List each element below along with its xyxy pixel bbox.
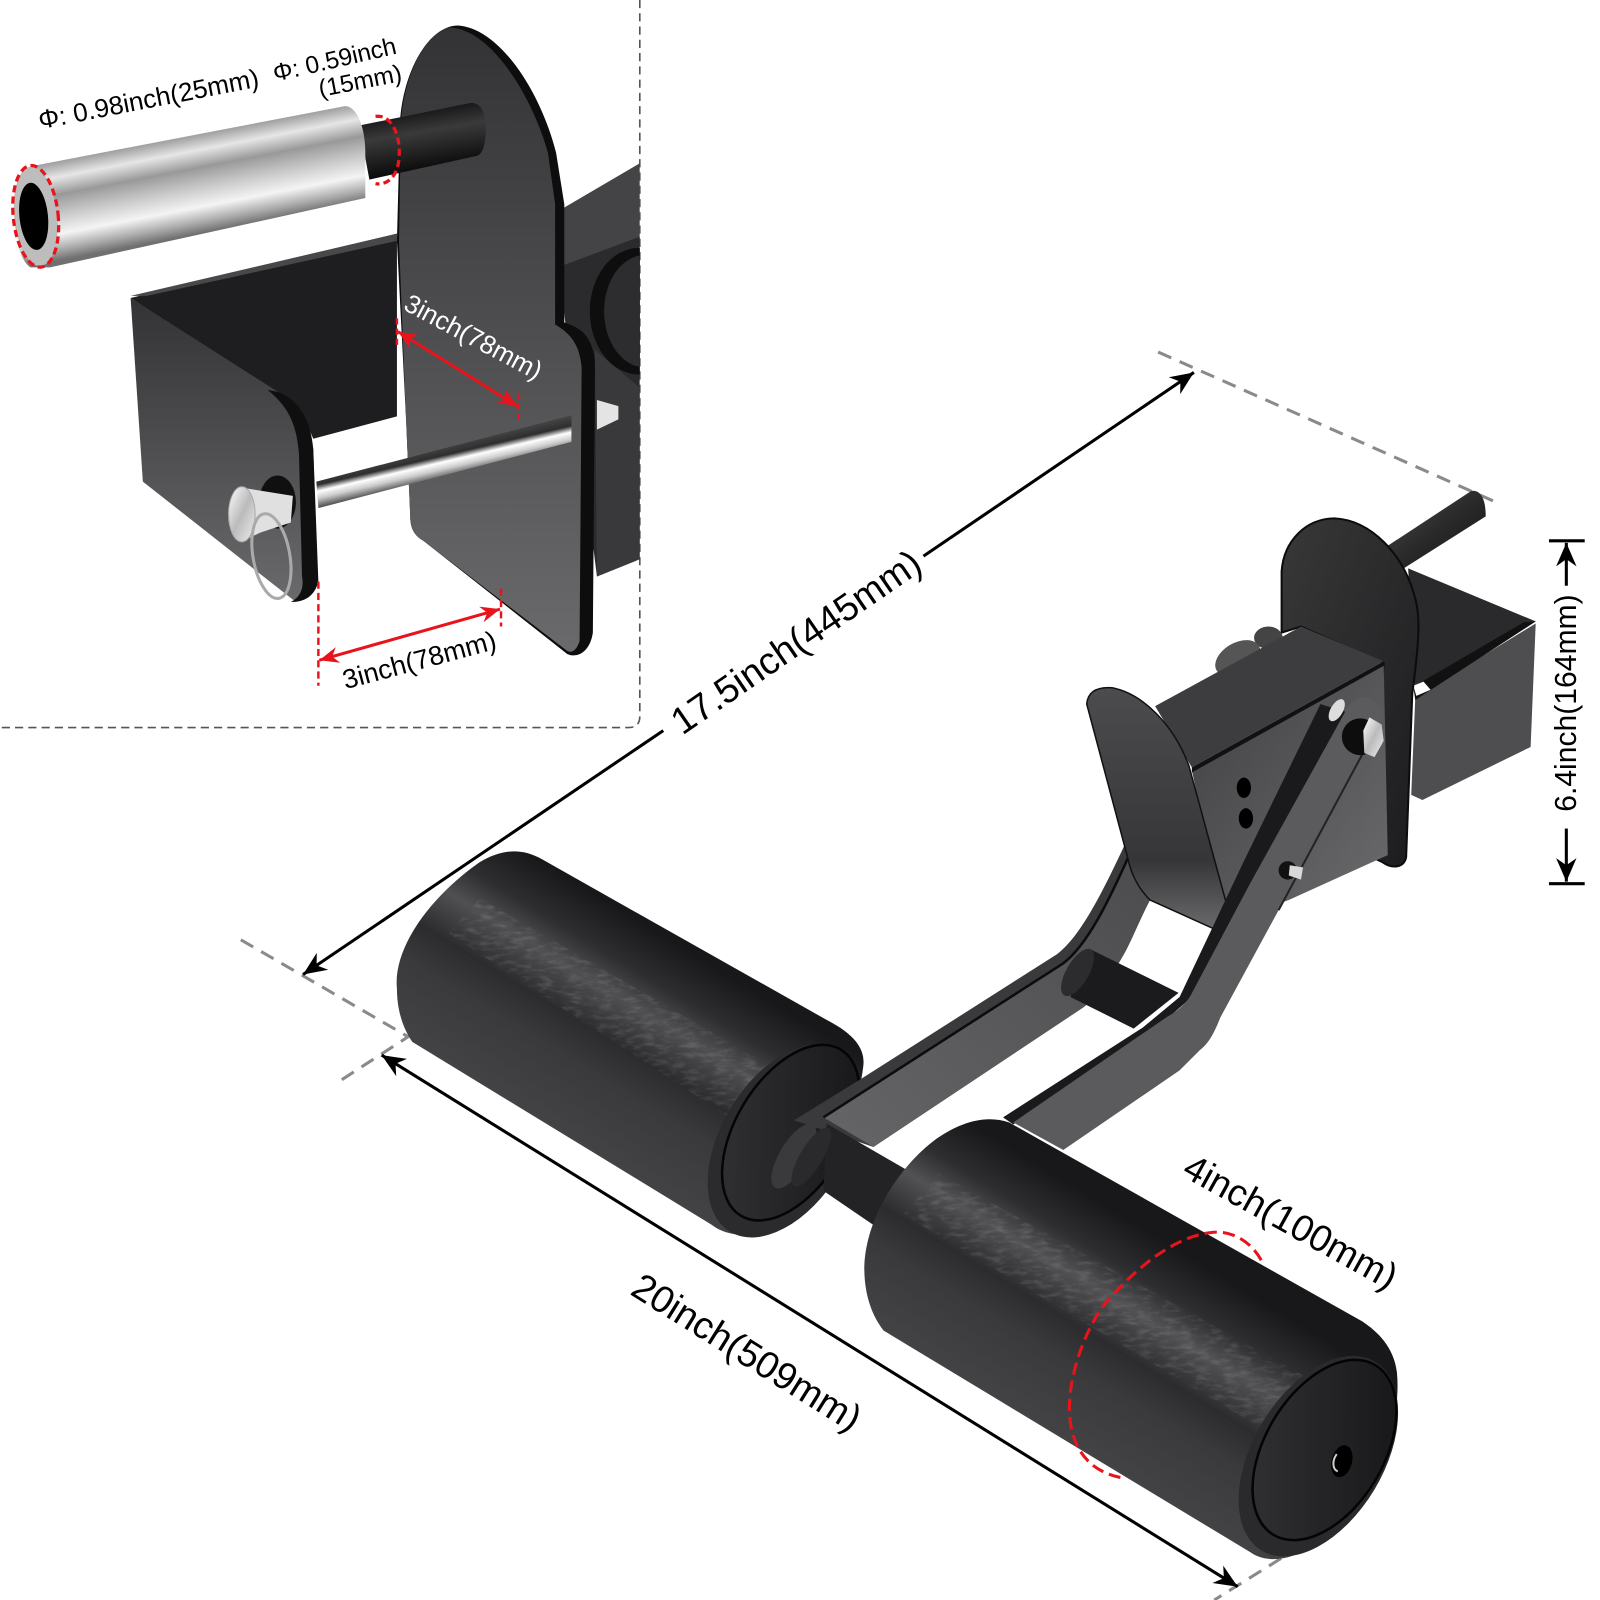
dimension: 6.4 inch height xyxy=(1549,541,1585,884)
inset: U bracket xyxy=(131,234,397,602)
inset: upright rounded plate xyxy=(397,26,595,655)
dashed extension lines xyxy=(241,352,1498,1600)
arm: rear strap xyxy=(794,841,1150,1147)
leather highlight right xyxy=(903,1173,1316,1434)
axle between rollers xyxy=(763,1117,923,1235)
inset: square tube behind plate xyxy=(564,164,640,576)
inset: silver sleeve tube xyxy=(9,106,365,268)
rear upright plate xyxy=(1282,518,1419,866)
front fan plate xyxy=(1087,688,1227,929)
red diameter markers xyxy=(8,116,399,269)
label: inner width: 3inch(78mm) xyxy=(399,288,548,386)
dimension: 20 inch width: 20inch(509mm) xyxy=(625,1265,869,1439)
label: sleeve diameter: Φ: 0.98inch(25mm) xyxy=(36,63,261,135)
cross cylinder xyxy=(1055,944,1179,1029)
right roller end cap xyxy=(1206,1328,1431,1584)
rear rod xyxy=(1367,491,1486,584)
hex bolt xyxy=(1325,697,1384,757)
dimension: 6.4 inch height: 6.4inch(164mm) xyxy=(1550,594,1583,812)
leather highlight left xyxy=(449,898,806,1138)
inset: locking pin xyxy=(229,400,618,602)
label: rod diameter metric: (15mm) xyxy=(316,60,404,103)
inset panel: mounting bracket detail xyxy=(0,0,688,728)
rear U bracket xyxy=(1408,568,1536,800)
left roller xyxy=(397,851,894,1264)
small bolt xyxy=(1279,861,1303,880)
square tube xyxy=(1155,627,1388,923)
dimension: 20 inch width xyxy=(382,1055,1238,1587)
product: upper assembly xyxy=(794,491,1536,1150)
dimension: 4 inch roller diameter: 4inch(100mm) xyxy=(1177,1145,1405,1297)
left roller end cap xyxy=(676,1017,894,1264)
label: rod diameter: Φ: 0.59inch xyxy=(270,33,399,87)
red dimension: inner 3 inch xyxy=(397,318,518,422)
label: outer width: 3inch(78mm) xyxy=(339,625,499,695)
red diameter arc xyxy=(1069,1232,1261,1478)
washers xyxy=(1254,627,1283,649)
red dimension: outer 3 inch xyxy=(318,582,501,686)
dimension: 17.5 inch depth xyxy=(303,372,1194,974)
dimension: 17.5 inch depth: 17.5inch(445mm) xyxy=(663,541,929,742)
inset dashed border xyxy=(0,0,640,728)
arm: front strap xyxy=(1003,698,1382,1150)
inset: black inner rod xyxy=(359,103,486,180)
right roller xyxy=(864,1119,1431,1584)
